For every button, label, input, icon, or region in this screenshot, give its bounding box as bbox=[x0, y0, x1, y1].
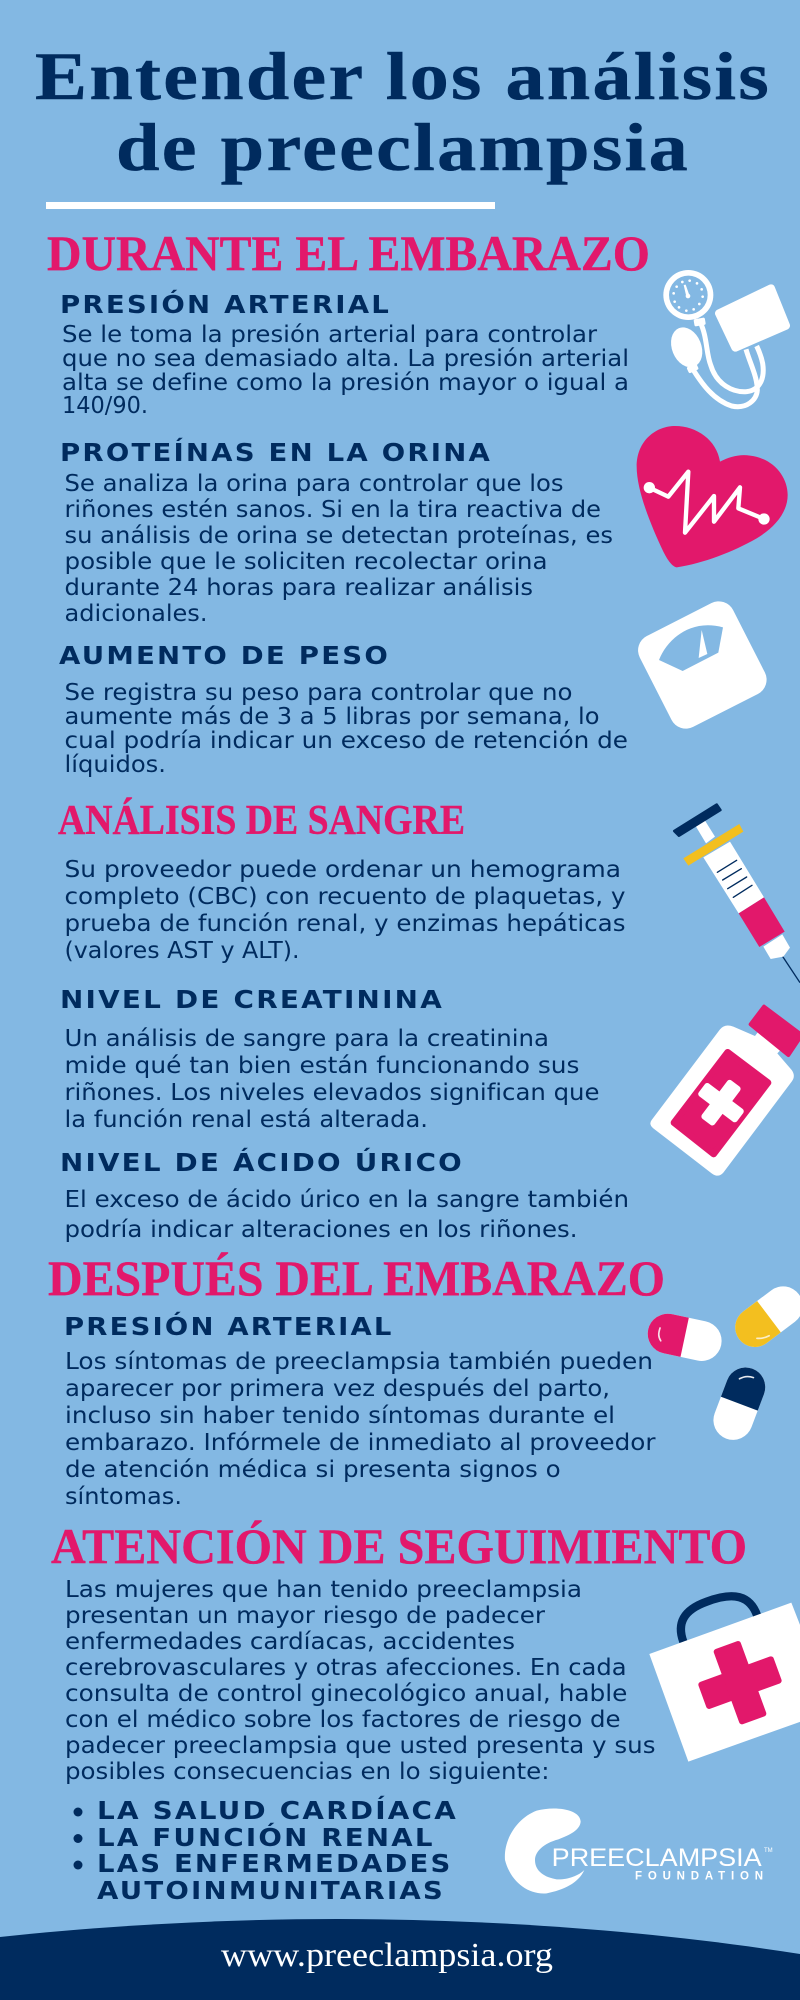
body text: durante 24 horas para realizar análisis bbox=[64, 575, 533, 601]
body text: Un análisis de sangre para la creatinina bbox=[64, 1026, 549, 1052]
subheading: PRESIÓN ARTERIAL bbox=[64, 1311, 394, 1341]
body text bbox=[64, 1026, 600, 1133]
panel: aumento de peso bbox=[59, 641, 628, 778]
body text: Los síntomas de preeclampsia también pueden bbox=[65, 1349, 653, 1375]
bullet list: LAS ENFERMEDADES bbox=[97, 1849, 452, 1878]
body text: incluso sin haber tenido síntomas durante el bbox=[65, 1403, 615, 1429]
body text bbox=[64, 471, 613, 627]
pink pill bbox=[644, 1310, 725, 1365]
icon: first aid kit bbox=[649, 1596, 800, 1762]
body text: atención de seguimiento: padecer preeclampsia que usted presenta y sus bbox=[65, 1733, 656, 1759]
heading: después del embarazo: DESPUÉS DEL EMBARAZO bbox=[48, 1250, 665, 1306]
title: Entender los análisis bbox=[35, 38, 771, 114]
body text bbox=[62, 322, 629, 419]
logo: Preeclampsia Foundation bbox=[505, 1808, 773, 1893]
heading: análisis de sangre: ANÁLISIS DE SANGRE bbox=[58, 797, 465, 844]
body text bbox=[64, 680, 628, 778]
title bbox=[35, 38, 771, 185]
body text: su análisis de orina se detectan proteínas, es bbox=[64, 523, 613, 549]
subheading: NIVEL DE ÁCIDO ÚRICO bbox=[60, 1147, 464, 1177]
icon: syringe bbox=[674, 805, 800, 983]
logo: Preeclampsia Foundation: FOUNDATION bbox=[635, 1870, 763, 1882]
subheading: AUMENTO DE PESO bbox=[59, 641, 390, 670]
body text: atención de seguimiento: Las mujeres que han tenido preeclampsia bbox=[65, 1577, 582, 1603]
heading: durante el embarazo: DURANTE EL EMBARAZO bbox=[47, 225, 650, 281]
bullet list: LA SALUD CARDÍACA bbox=[97, 1796, 458, 1825]
body text: 140/90. bbox=[62, 393, 148, 419]
body text: análisis de sangre: Su proveedor puede ordenar un hemograma bbox=[64, 857, 621, 883]
body text: atención de seguimiento: consulta de control ginecológico anual, hable bbox=[65, 1681, 627, 1707]
body text: aparecer por primera vez después del parto, bbox=[65, 1376, 610, 1402]
icon: heart with pulse bbox=[637, 426, 788, 567]
body text: de atención médica si presenta signos o bbox=[65, 1457, 561, 1483]
body text: adicionales. bbox=[64, 601, 207, 627]
body text: análisis de sangre: completo (CBC) con recuento de plaquetas, y bbox=[64, 884, 626, 910]
body text: alta se define como la presión mayor o igual a bbox=[62, 370, 629, 396]
body text: que no sea demasiado alta. La presión arterial bbox=[62, 346, 629, 372]
footer band bbox=[0, 1919, 800, 2000]
body text: Se analiza la orina para controlar que los bbox=[64, 471, 564, 497]
body text: posible que le soliciten recolectar orina bbox=[64, 549, 548, 575]
body text bbox=[64, 1187, 629, 1243]
body text: Se registra su peso para controlar que no bbox=[64, 680, 572, 706]
logo swirl bbox=[505, 1808, 584, 1893]
logo: Preeclampsia Foundation: TM bbox=[764, 1848, 773, 1854]
body text: El exceso de ácido úrico en la sangre también bbox=[64, 1187, 629, 1213]
panel: presión arterial bbox=[60, 289, 629, 419]
panel: nivel de creatinina bbox=[60, 985, 600, 1133]
subheading: PROTEÍNAS EN LA ORINA bbox=[60, 438, 492, 467]
body text: atención de seguimiento: presentan un mayor riesgo de padecer bbox=[65, 1603, 546, 1629]
bullet list: AUTOINMUNITARIAS bbox=[97, 1876, 445, 1905]
body text: atención de seguimiento: cerebrovasculares y otras afecciones. En cada bbox=[65, 1655, 627, 1681]
body text: embarazo. Infórmele de inmediato al proveedor bbox=[65, 1430, 656, 1456]
website: www.preeclampsia.org bbox=[221, 1937, 553, 1974]
icon: medicine bottle bbox=[650, 1007, 800, 1176]
body text: atención de seguimiento: con el médico sobre los factores de riesgo de bbox=[65, 1707, 621, 1733]
logo: Preeclampsia Foundation: PREECLAMPSIA bbox=[552, 1844, 762, 1872]
icon: blood pressure monitor bbox=[663, 270, 786, 407]
body text: análisis de sangre: (valores AST y ALT). bbox=[64, 938, 300, 964]
body text: Se le toma la presión arterial para controlar bbox=[62, 322, 598, 348]
body text: cual podría indicar un exceso de retención de bbox=[64, 728, 628, 754]
body text: atención de seguimiento bbox=[65, 1577, 656, 1785]
body text: líquidos. bbox=[64, 752, 166, 778]
body text: aumente más de 3 a 5 libras por semana, lo bbox=[64, 704, 600, 730]
body text: mide qué tan bien están funcionando sus bbox=[64, 1053, 580, 1079]
title: de preeclampsia bbox=[116, 109, 690, 185]
body text: análisis de sangre: prueba de función renal, y enzimas hepáticas bbox=[64, 911, 626, 937]
subheading: PRESIÓN ARTERIAL bbox=[60, 289, 391, 319]
body text: atención de seguimiento: enfermedades cardíacas, accidentes bbox=[65, 1629, 515, 1655]
icon: pills bbox=[644, 1278, 800, 1446]
bullet list: LA FUNCIÓN RENAL bbox=[97, 1822, 435, 1852]
body text: la función renal está alterada. bbox=[64, 1107, 428, 1133]
body text: riñones estén sanos. Si en la tira reactiva de bbox=[64, 497, 601, 523]
body text: podría indicar alteraciones en los riñones. bbox=[64, 1217, 578, 1243]
bullet list bbox=[74, 1796, 458, 1905]
yellow pill bbox=[727, 1278, 800, 1355]
body text: síntomas. bbox=[65, 1484, 182, 1510]
panel: nivel de ácido úrico bbox=[60, 1147, 629, 1243]
heading: atención de seguimiento: ATENCIÓN DE SEGUIMIENTO bbox=[51, 1518, 747, 1574]
navy pill bbox=[708, 1362, 771, 1446]
subheading: NIVEL DE CREATININA bbox=[60, 985, 444, 1014]
body text: riñones. Los niveles elevados significan que bbox=[64, 1080, 600, 1106]
body text: atención de seguimiento: posibles consecuencias en lo siguiente: bbox=[65, 1759, 550, 1785]
panel: presión arterial posparto bbox=[64, 1311, 656, 1510]
body text bbox=[65, 1349, 656, 1510]
body text: análisis de sangre bbox=[64, 857, 626, 964]
icon: weight scale bbox=[633, 596, 772, 734]
panel: proteínas en la orina bbox=[60, 438, 613, 627]
